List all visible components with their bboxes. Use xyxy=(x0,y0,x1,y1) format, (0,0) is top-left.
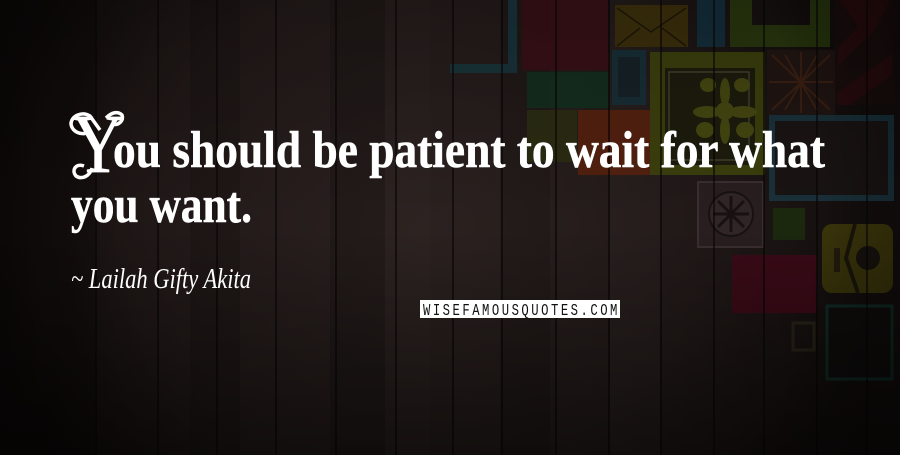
tile: red chevrons xyxy=(835,0,895,105)
tile: red block lower xyxy=(732,255,817,313)
tile: teal square xyxy=(612,50,646,105)
quote text xyxy=(71,98,826,234)
tile: blue xyxy=(697,0,725,47)
swash capital Y: Y xyxy=(72,98,124,191)
tile: yellow envelope xyxy=(615,5,688,47)
quote line 2: you want. xyxy=(71,177,252,234)
tile: orange starburst xyxy=(767,50,835,115)
tile: green small xyxy=(773,208,805,240)
tile: red block xyxy=(522,0,608,70)
tile: pale medallion xyxy=(698,182,763,247)
decorative coloured tile mural xyxy=(450,0,895,379)
tile: olive xyxy=(527,110,577,162)
author attribution: ~ Lailah Gifty Akita xyxy=(71,263,251,295)
tile: small pale square xyxy=(793,323,814,350)
tile: yellow frame with flower xyxy=(650,52,765,175)
tile: green hatch xyxy=(527,72,609,108)
tile: teal frame xyxy=(827,306,892,379)
tile: cyan corner xyxy=(450,0,512,68)
tile: orange xyxy=(578,110,650,175)
watermark badge: WISEFAMOUSQUOTES.COM xyxy=(423,302,617,321)
tile: yellow disc xyxy=(822,224,893,293)
tile: blue frame xyxy=(772,118,891,198)
tile: green frame xyxy=(730,0,830,47)
